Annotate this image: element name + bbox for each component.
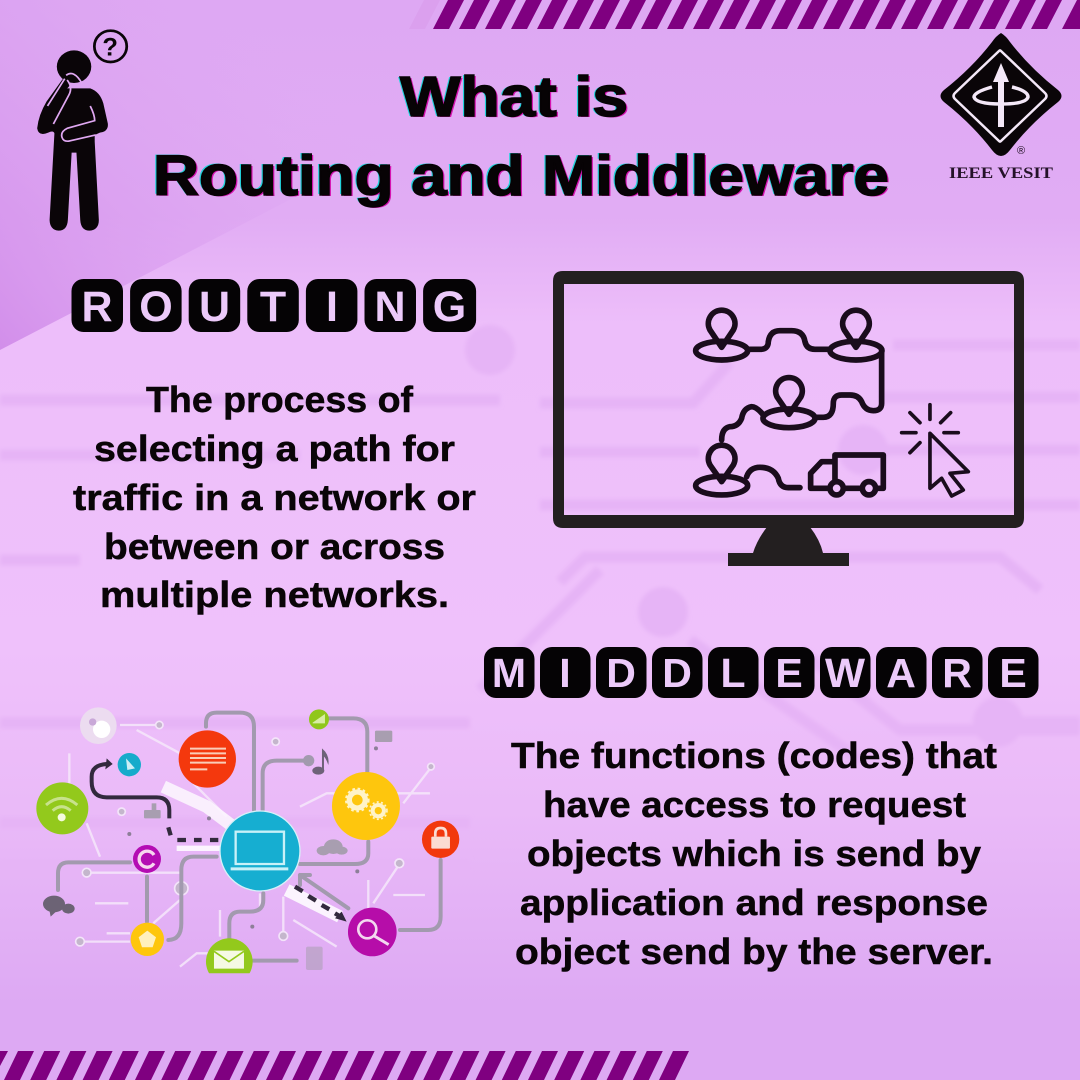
circle: laptop bbox=[220, 811, 300, 891]
text: middleware definition bbox=[511, 735, 997, 972]
heading: ROUTING: I bbox=[326, 283, 338, 331]
faint nodes and small glyphs bbox=[76, 721, 434, 946]
heading: ROUTING: R bbox=[81, 283, 113, 331]
delivery truck bbox=[811, 455, 883, 495]
title: What is bbox=[398, 65, 626, 129]
click cursor bbox=[902, 405, 968, 496]
heading: ROUTING bbox=[72, 279, 476, 332]
logo: IEEE VESIT: IEEE VESIT bbox=[949, 165, 1053, 182]
bottom stripes bbox=[0, 1051, 689, 1080]
faint grey glyphs bbox=[144, 731, 392, 970]
route path bbox=[722, 331, 882, 488]
top stripes bbox=[409, 0, 1080, 29]
text: routing definition bbox=[73, 379, 476, 615]
heading: ROUTING: N bbox=[374, 283, 406, 331]
faint white traces bbox=[69, 725, 432, 967]
title bbox=[151, 65, 891, 209]
text: routing definition: traffic in a network or bbox=[73, 477, 476, 518]
text: routing definition: between or across bbox=[104, 526, 445, 567]
faint white circle bbox=[80, 707, 117, 744]
title: Routing and Middleware bbox=[151, 143, 887, 207]
heading: ROUTING: T bbox=[260, 283, 286, 331]
text: middleware definition: have access to request bbox=[543, 784, 966, 825]
speech bubbles bbox=[43, 896, 75, 917]
title: Routing and Middleware bbox=[155, 145, 891, 209]
text: middleware definition: object send by the server. bbox=[515, 931, 993, 972]
heading: MIDDLEWARE: A bbox=[886, 650, 916, 696]
heading: MIDDLEWARE: E bbox=[999, 650, 1027, 696]
text: middleware definition: application and response bbox=[520, 882, 988, 923]
icon: monitor with delivery route bbox=[553, 271, 1024, 566]
logo: IEEE VESIT: ® bbox=[1017, 145, 1025, 157]
title: What is bbox=[402, 66, 630, 130]
circle: star bbox=[131, 923, 164, 956]
heading: MIDDLEWARE: D bbox=[662, 650, 692, 696]
circle: rocket bbox=[118, 753, 141, 776]
network illustration bbox=[36, 707, 459, 985]
heading: MIDDLEWARE: I bbox=[559, 650, 571, 696]
heading: MIDDLEWARE: D bbox=[606, 650, 636, 696]
grey connector lines bbox=[58, 713, 441, 961]
heading: ROUTING: O bbox=[139, 283, 173, 331]
heading: MIDDLEWARE: E bbox=[775, 650, 803, 696]
circle: document bbox=[179, 730, 236, 788]
heading: MIDDLEWARE: R bbox=[942, 650, 972, 696]
heading: MIDDLEWARE: L bbox=[720, 650, 746, 696]
circle: wifi bbox=[36, 782, 88, 834]
route map pins bbox=[696, 310, 882, 495]
title: Routing and Middleware bbox=[153, 144, 889, 208]
heading: ROUTING: G bbox=[433, 283, 466, 331]
heading: ROUTING: U bbox=[199, 283, 230, 331]
circle: mail bbox=[206, 938, 253, 974]
dark dashed arrow bbox=[92, 758, 347, 922]
circle: gears bbox=[332, 772, 400, 840]
heading: MIDDLEWARE: W bbox=[825, 650, 865, 696]
heading: MIDDLEWARE: M bbox=[492, 650, 526, 696]
text: routing definition: selecting a path for bbox=[94, 428, 455, 469]
title: What is bbox=[400, 65, 628, 129]
text: routing definition: The process of bbox=[146, 379, 414, 420]
circle: signal bbox=[309, 709, 329, 729]
circle: refresh bbox=[133, 845, 161, 873]
text: middleware definition: objects which is send by bbox=[527, 833, 981, 874]
circle: lock bbox=[422, 821, 459, 858]
icon: thinking person: ? bbox=[102, 34, 118, 61]
text: middleware definition: The functions (codes) that bbox=[511, 735, 997, 776]
heading: MIDDLEWARE bbox=[484, 647, 1038, 698]
logo: IEEE VESIT bbox=[940, 33, 1062, 182]
circle: search bbox=[348, 908, 397, 956]
text: routing definition: multiple networks. bbox=[100, 574, 449, 615]
icon: thinking person bbox=[37, 31, 127, 231]
music note bbox=[312, 748, 329, 775]
